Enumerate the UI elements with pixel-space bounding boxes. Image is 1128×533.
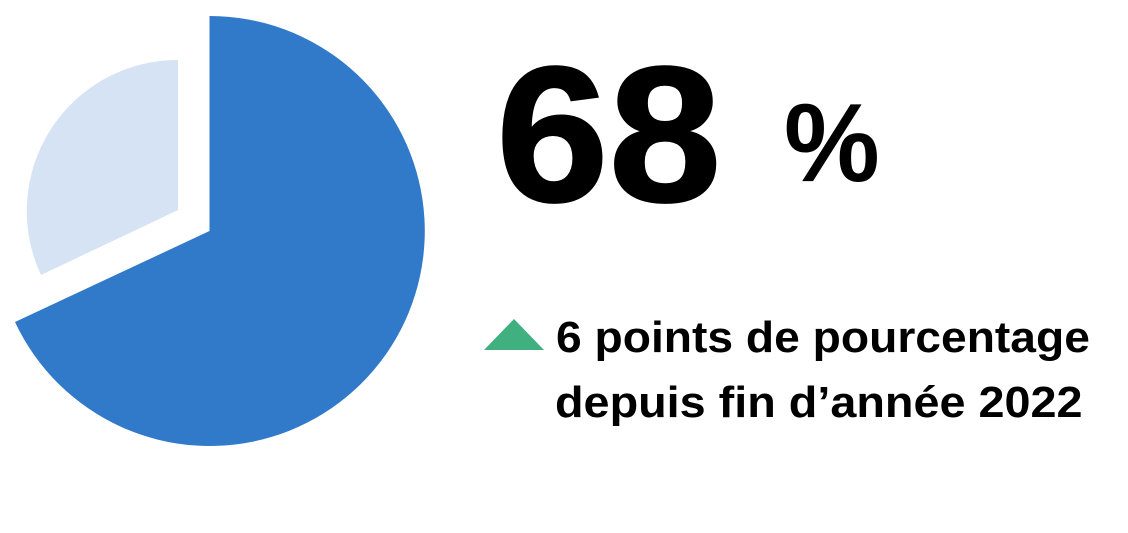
line 1: 6 points de pourcentage [556, 312, 1090, 362]
line 2: depuis fin d’année 2022 [555, 377, 1082, 427]
change text [555, 312, 1090, 427]
pie chart [15, 16, 425, 446]
icon: green up triangle [484, 319, 544, 350]
pie slice: remainder [27, 60, 178, 275]
pie slice: 68 percent [15, 16, 425, 446]
percent sign: % [784, 82, 880, 205]
big number: 68 [496, 26, 721, 242]
